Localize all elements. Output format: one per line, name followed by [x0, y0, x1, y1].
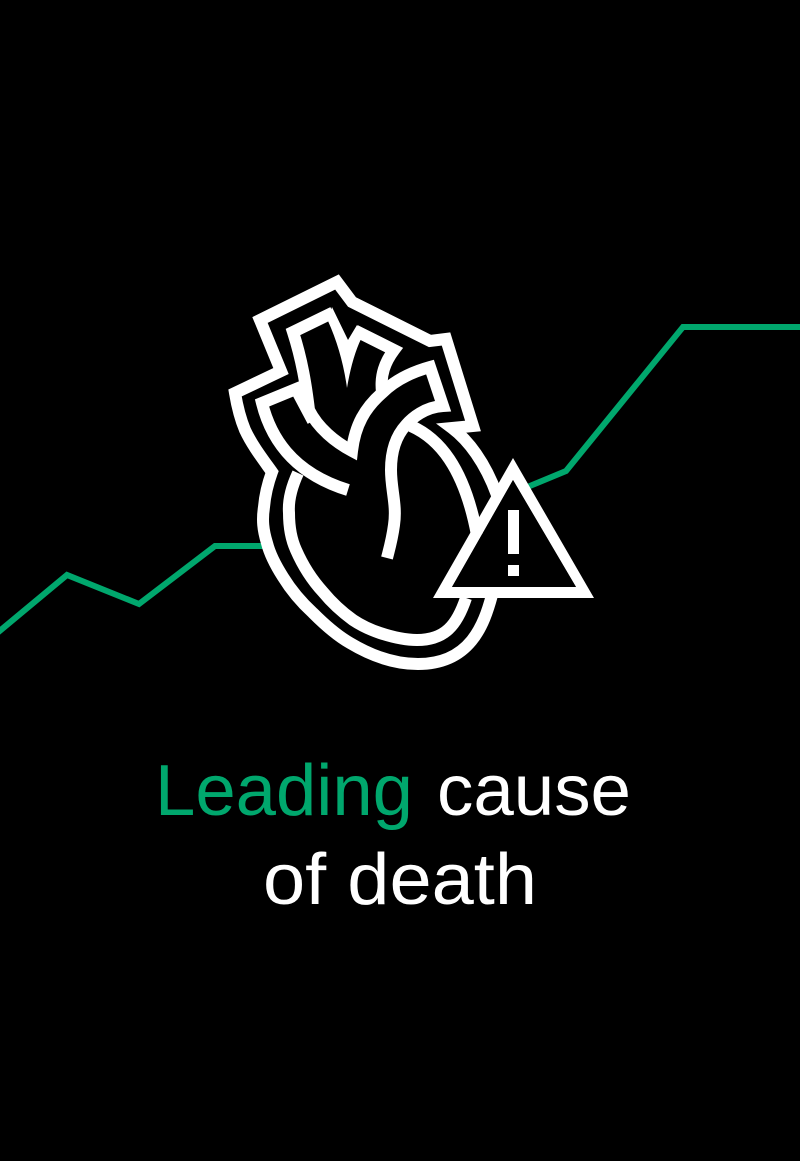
title: Leading [155, 751, 413, 831]
title [155, 751, 631, 920]
green trend line [0, 327, 800, 634]
icon: anatomical heart [235, 282, 497, 664]
title: of death [263, 840, 537, 920]
title: cause [437, 751, 631, 831]
icon: warning triangle [433, 458, 594, 598]
